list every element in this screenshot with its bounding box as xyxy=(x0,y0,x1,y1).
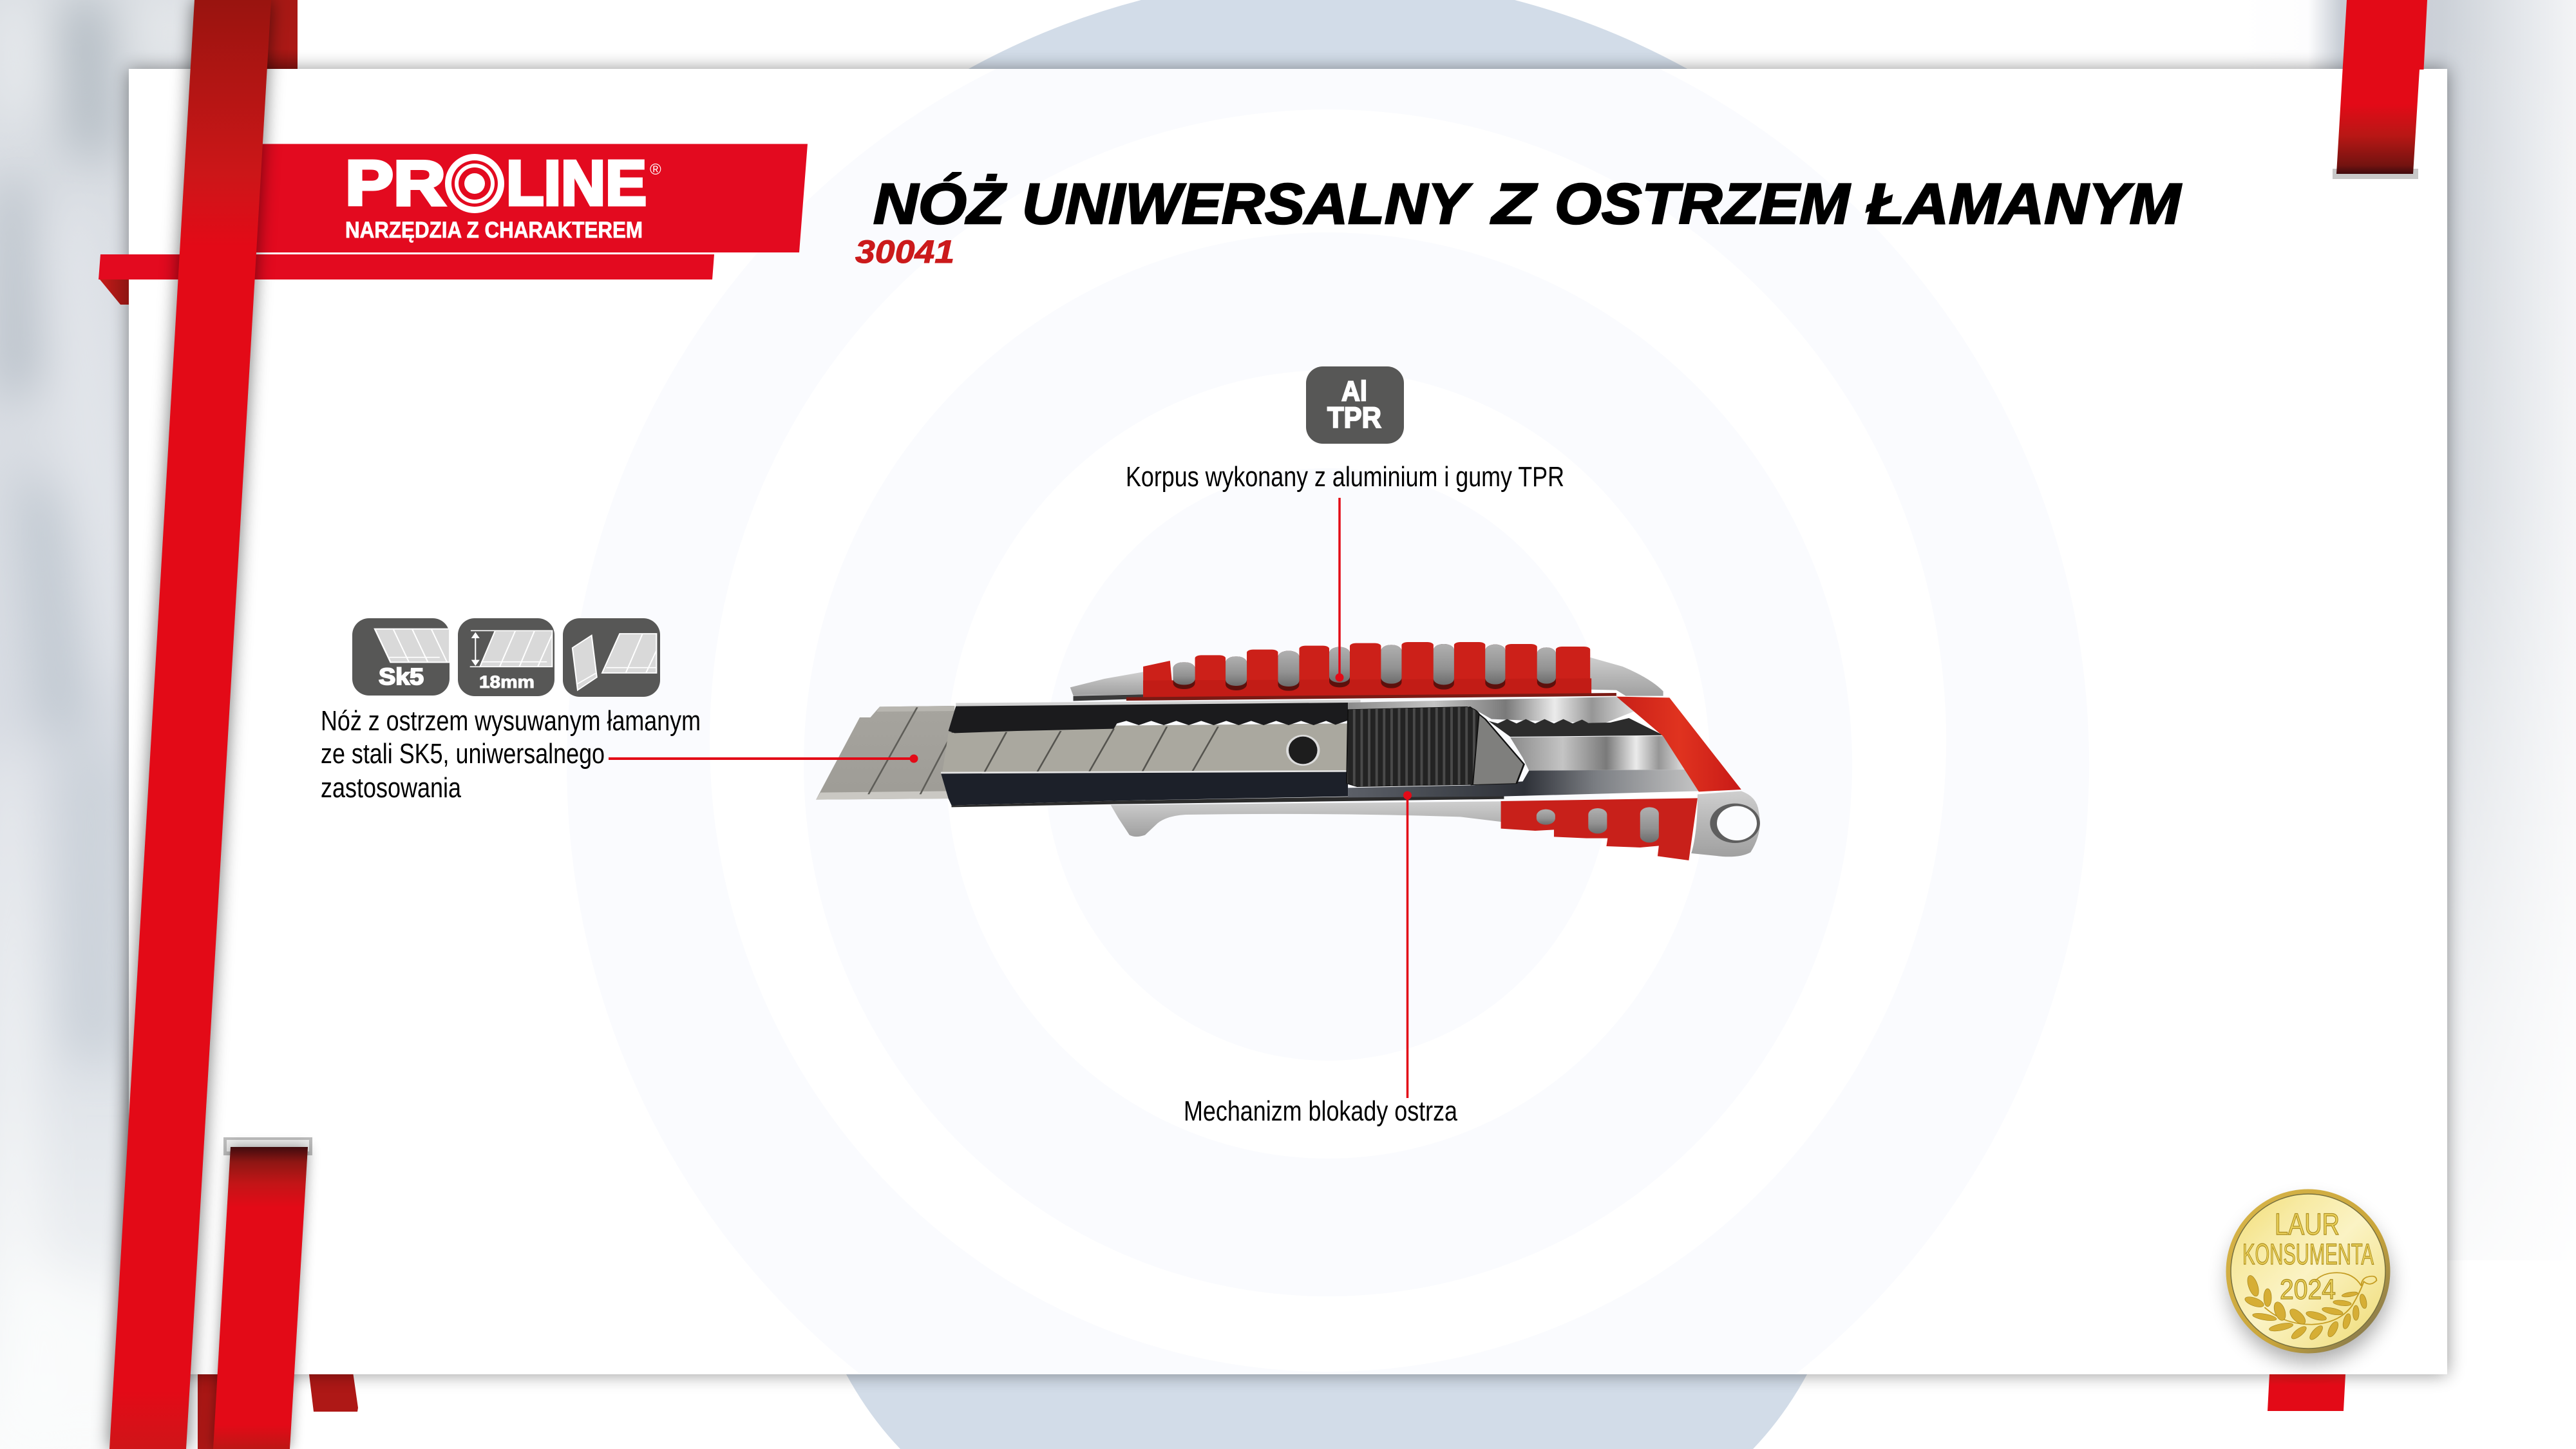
title: OSTRZEM xyxy=(1555,171,1851,236)
title: NÓŻ xyxy=(873,171,1007,236)
knife: lock screw xyxy=(1286,735,1320,766)
background circle visible above and below the panel xyxy=(846,0,1807,1449)
product code: 30041 xyxy=(855,234,954,270)
logo: registered mark: ® xyxy=(650,161,661,178)
logo: tagline: NARZĘDZIA Z CHARAKTEREM xyxy=(345,218,643,243)
logo: PR letters: PR xyxy=(345,147,446,218)
text: body material: Korpus wykonany z aluminium i gumy TPR xyxy=(1126,461,1564,493)
title: ŁAMANYM xyxy=(1866,171,2182,236)
knife: blade in the slide window xyxy=(942,723,1348,773)
medal laurel branch xyxy=(2243,1273,2376,1341)
text: blade description: Nóż z ostrzem wysuwanym łamanym xyxy=(321,705,701,737)
logo banner: folded tip xyxy=(100,279,129,305)
red tab under panel, bottom right xyxy=(2268,1374,2345,1411)
title: UNIWERSALNY xyxy=(1022,171,1473,236)
knife: chrome body xyxy=(1348,697,1701,797)
logo: target O xyxy=(445,154,504,213)
knife: slider lock with grey wedge xyxy=(1347,706,1524,787)
icon: Al TPR material: TPR xyxy=(1327,401,1381,434)
icon: 18mm blade width: 18mm xyxy=(479,672,535,692)
medal text: 2024 xyxy=(2280,1274,2336,1305)
medal text: KONSUMENTA xyxy=(2242,1238,2374,1271)
logo PROLINE xyxy=(345,147,661,243)
logo banner: lower stripe xyxy=(99,254,714,279)
background: left curtain xyxy=(0,0,194,1347)
knife: exposed blade tip xyxy=(816,706,954,800)
right top ribbon xyxy=(2333,0,2427,179)
icon: Sk5 steel blade: Sk5 xyxy=(379,663,424,690)
knife: lower red grip xyxy=(1501,798,1698,860)
text: lock mechanism: Mechanizm blokady ostrza xyxy=(1184,1095,1457,1127)
icon: 18mm blade width xyxy=(458,618,554,696)
knife: red nose strip xyxy=(1616,697,1741,791)
medal text xyxy=(2242,1207,2374,1305)
medal text: LAUR xyxy=(2275,1207,2340,1241)
text: blade description xyxy=(321,705,701,804)
arrow: body callout line xyxy=(1336,498,1343,681)
logo: LINE letters: LINE xyxy=(506,147,647,218)
knife: upper red ribbed grip xyxy=(1126,642,1616,701)
icon: Al TPR material xyxy=(1306,366,1404,444)
main left ribbon xyxy=(109,0,271,1449)
text: blade description: ze stali SK5, uniwersalnego xyxy=(321,738,605,770)
product photo: utility knife xyxy=(816,642,1760,860)
background: right curtain xyxy=(2241,0,2576,1260)
knife: upper silver ends xyxy=(1070,657,1663,701)
icon: Sk5 steel blade xyxy=(352,618,450,696)
knife: black rails xyxy=(941,700,1504,807)
medal shadow xyxy=(2229,1203,2390,1363)
arrow: blade callout line xyxy=(609,755,918,762)
medal: Laur Konsumenta 2024 xyxy=(2226,1189,2391,1363)
lower left second ribbon xyxy=(213,1137,312,1449)
dark ribbon pieces behind the panel xyxy=(198,0,358,1449)
arrow: lock callout line xyxy=(1403,791,1412,1098)
icon: Al TPR material: Al xyxy=(1341,375,1367,407)
text: blade description: zastosowania xyxy=(321,772,461,804)
medal disc xyxy=(2226,1189,2391,1354)
knife: end ring xyxy=(1691,791,1760,857)
logo banner xyxy=(99,144,808,305)
knife: lower silver handle xyxy=(1111,801,1504,837)
icon: snap-off blade xyxy=(563,618,660,697)
title: Z xyxy=(1490,171,1538,236)
title xyxy=(873,171,2182,236)
panel: faint concentric rings xyxy=(567,69,2089,1374)
logo banner: main red shape xyxy=(245,144,808,252)
